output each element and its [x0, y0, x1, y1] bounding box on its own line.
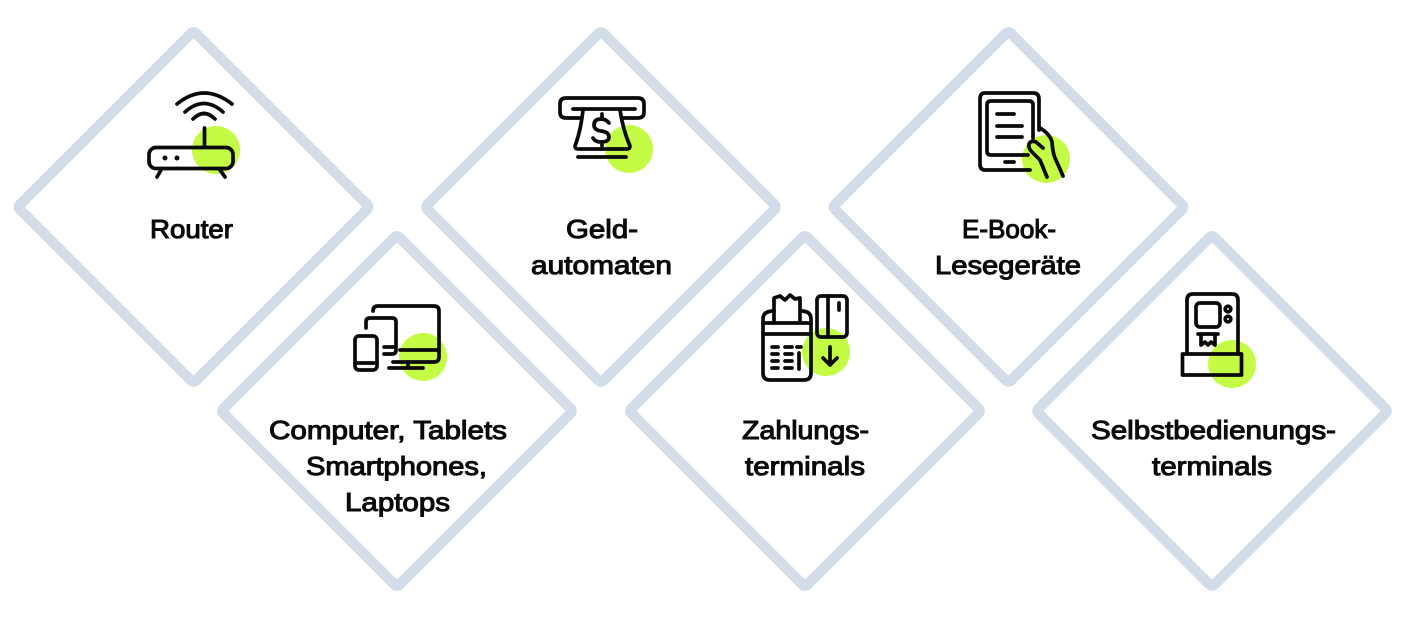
- label: Selbstbedienungsterminals: Selbstbedienungs-: [1091, 415, 1336, 445]
- label: Selbstbedienungsterminals: terminals: [1152, 451, 1272, 481]
- label: Geldautomaten: Geld-: [566, 214, 638, 244]
- label: Computer, Tablets, Smartphones, Laptops: [269, 415, 507, 517]
- panel: E-Book-Lesegeräte: [834, 32, 1183, 382]
- label: Zahlungsterminals: terminals: [745, 451, 865, 481]
- icon: cash machine: [560, 98, 653, 173]
- label: Computer, Tablets, Smartphones, Laptops: Computer, Tablets: [269, 415, 507, 445]
- icon: payment terminal and card: [763, 295, 850, 380]
- icon: router: [149, 93, 240, 177]
- label: E-Book-Lesegeräte: E-Book-: [962, 214, 1056, 244]
- label: E-Book-Lesegeräte: Lesegeräte: [935, 250, 1081, 280]
- label: Geldautomaten: [531, 214, 672, 280]
- icon: e-book reader with hand: [980, 93, 1070, 183]
- panel: Router: [19, 32, 368, 382]
- panel: Geldautomaten: [426, 32, 776, 382]
- panel: Computer, Tablets, Smartphones, Laptops: [222, 236, 572, 586]
- panel: Zahlungsterminals: [630, 236, 980, 586]
- label: Router: Router: [150, 214, 233, 244]
- label: Selbstbedienungsterminals: [1091, 415, 1336, 481]
- icon: computer, tablet and phone: [355, 306, 447, 381]
- icon: self-service kiosk: [1182, 294, 1256, 388]
- label: E-Book-Lesegeräte: [935, 214, 1081, 280]
- label: Computer, Tablets, Smartphones, Laptops: Laptops: [345, 487, 450, 517]
- label: Computer, Tablets, Smartphones, Laptops: Smartphones,: [306, 451, 487, 481]
- label: Geldautomaten: automaten: [531, 250, 672, 280]
- label: Zahlungsterminals: Zahlungs-: [742, 415, 869, 445]
- label: Zahlungsterminals: [742, 415, 869, 481]
- panel: Selbstbedienungsterminals: [1037, 236, 1387, 586]
